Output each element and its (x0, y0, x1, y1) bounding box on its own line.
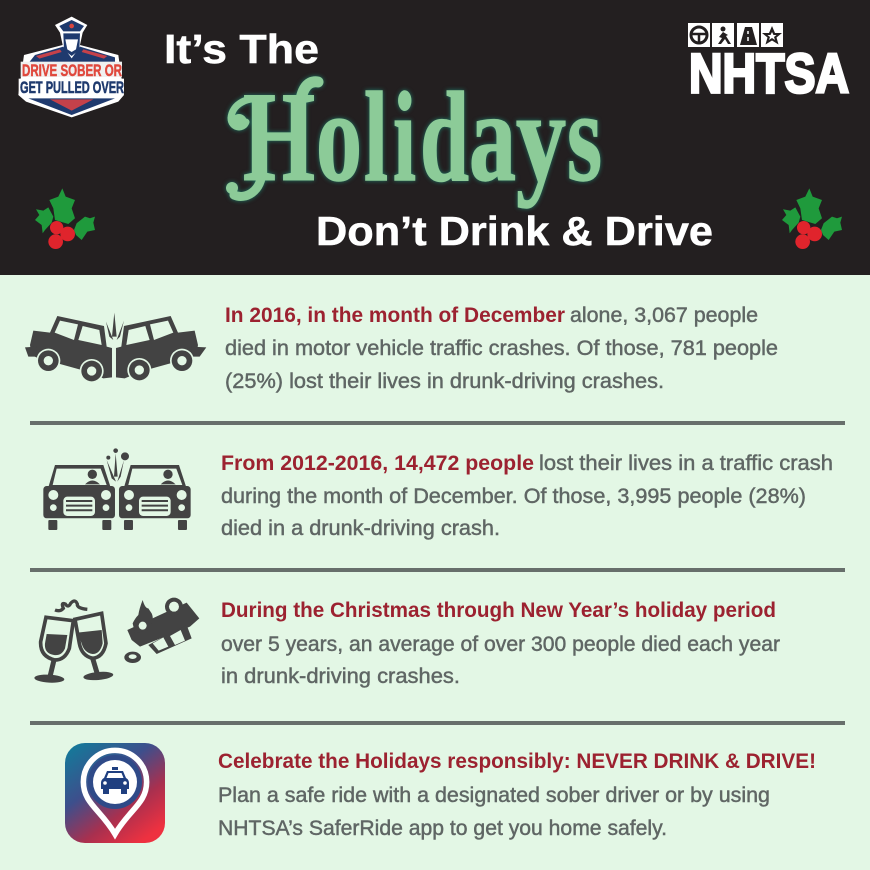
icon: SaferRide app (65, 743, 165, 843)
background panel (0, 275, 870, 870)
icon: holly right (782, 188, 842, 249)
icon: holly left (35, 188, 95, 249)
text block: 2012-2016: during the month of December. Of those, 3,995 people (28%) (221, 485, 806, 508)
heading: Holidays (226, 66, 602, 208)
panel: SaferRide (65, 743, 816, 843)
icon: front crash (43, 448, 191, 530)
heading: Holidays: s (567, 66, 602, 208)
text block: SaferRide: Plan a safe ride with a designated sober driver or by using (218, 784, 770, 807)
panel: 2012-2016 (43, 448, 833, 540)
logo: Drive Sober or Get Pulled Over (18, 17, 124, 117)
text block: SaferRide (218, 750, 816, 840)
header banner (0, 0, 870, 275)
text block: 2012-2016 (221, 452, 833, 540)
text block: 2012-2016: From 2012-2016, 14,472 people (221, 452, 534, 475)
text block: December 2016 (225, 304, 778, 393)
heading: Holidays: i (393, 66, 416, 208)
heading: Don't Drink & Drive: Don’t Drink & Drive (316, 208, 713, 254)
heading: Holidays: o (316, 66, 362, 208)
text block: Christmas through New Year: During the Christmas through New Year’s holiday period (221, 599, 776, 622)
panel: Christmas through New Year (34, 598, 780, 688)
icon: side crash (25, 313, 206, 383)
text block: 2012-2016: died in a drunk-driving crash. (221, 517, 500, 540)
logo: NHTSA (688, 23, 849, 104)
icon: toasting glasses and flipped car (34, 598, 199, 683)
text block: December 2016: In 2016, in the month of December (225, 304, 565, 327)
text block: December 2016: alone, 3,067 people (570, 304, 758, 327)
heading: Holidays: a (469, 66, 516, 208)
heading: It's The: It’s The (164, 26, 319, 72)
text block: December 2016: died in motor vehicle traffic crashes. Of those, 781 people (225, 337, 778, 360)
text block: Christmas through New Year: in drunk-driving crashes. (221, 665, 460, 688)
panel: December 2016 (25, 304, 778, 393)
logo: Drive Sober or Get Pulled Over: DRIVE SOBER OR (22, 61, 122, 80)
text block: SaferRide: Celebrate the Holidays responsibly: NEVER DRINK & DRIVE! (218, 750, 816, 773)
heading: Holidays: H (243, 66, 315, 208)
logo: Drive Sober or Get Pulled Over: GET PULLED OVER (20, 78, 124, 97)
heading: Holidays: l (364, 66, 388, 208)
text block: 2012-2016: lost their lives in a traffic crash (539, 452, 833, 475)
text block: Christmas through New Year: over 5 years, an average of over 300 people died each year (221, 633, 780, 656)
text block: December 2016: (25%) lost their lives in drunk-driving crashes. (225, 370, 664, 393)
heading: Holidays: y (516, 66, 566, 208)
text block: Christmas through New Year (221, 599, 780, 688)
heading: Holidays: d (420, 66, 469, 208)
text block: SaferRide: NHTSA’s SaferRide app to get you home safely. (218, 817, 667, 840)
